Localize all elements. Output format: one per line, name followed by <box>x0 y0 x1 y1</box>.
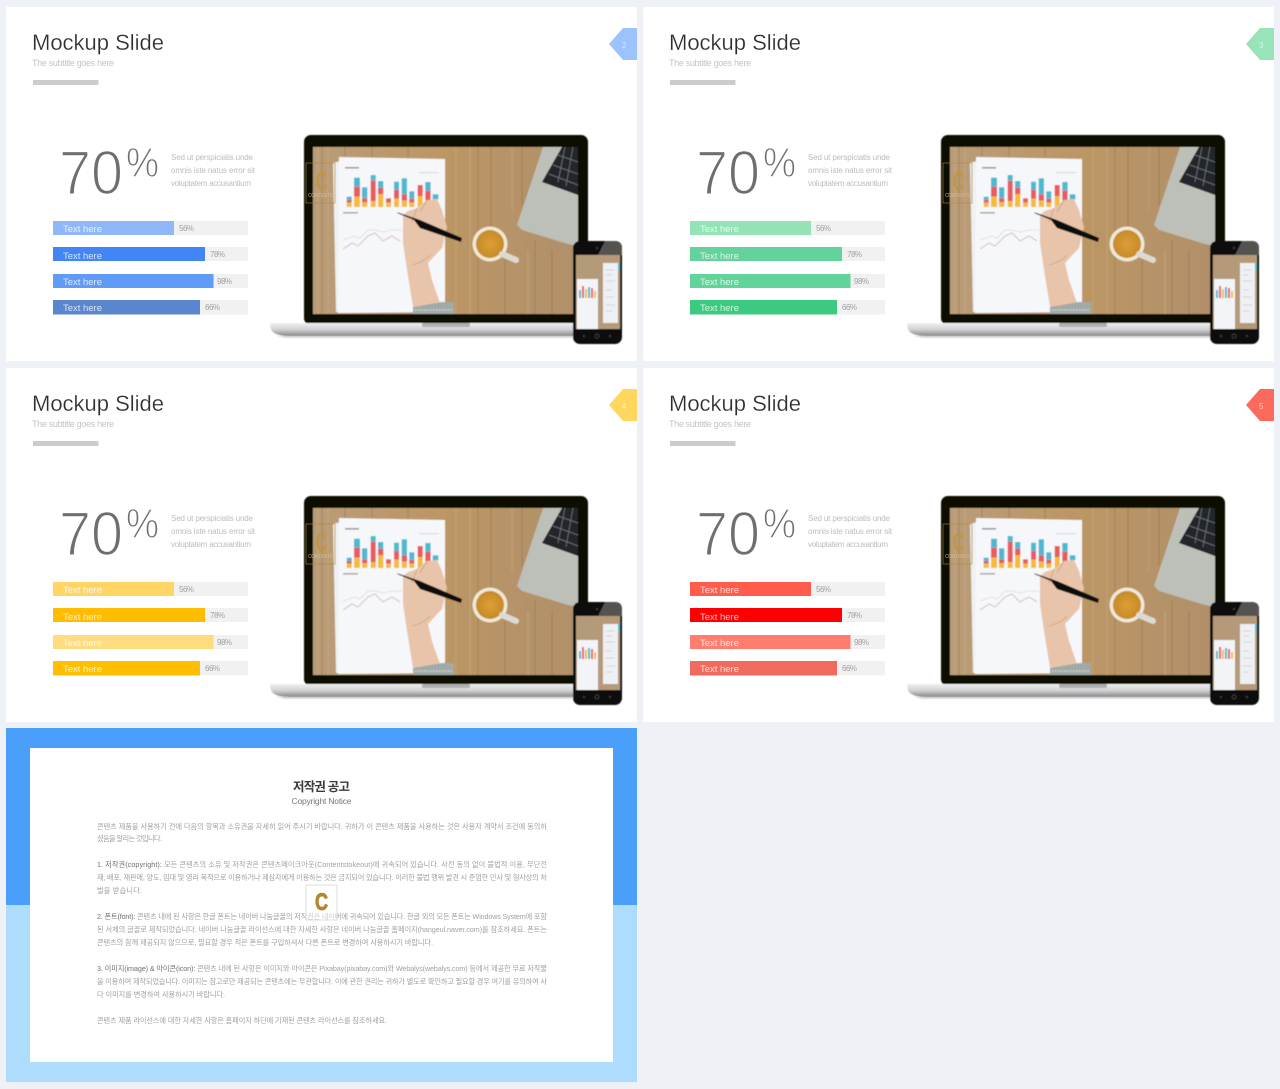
bar chart: Text here <box>63 224 102 235</box>
bar chart: 66% <box>842 664 857 673</box>
big number: % <box>763 500 796 547</box>
bar chart: 78% <box>210 611 225 620</box>
subtitle: The subtitle goes here <box>669 419 751 429</box>
description: omnis iste natus error sit <box>171 527 256 536</box>
section 2: font: 된 서체의 글꼴로 제작되었습니다. 네이버 나눔글꼴 라이선스에 대한 자세한 사항은 네이버 나눔글꼴 홈페이지(hangeul.naver.com)를 참조하세요. 폰트는 <box>97 925 547 934</box>
device mockup <box>270 135 622 344</box>
watermark <box>943 524 972 564</box>
bar chart: Text here <box>63 585 102 596</box>
bar chart: 98% <box>217 638 232 647</box>
big number: % <box>126 500 159 547</box>
bar chart: Text here <box>700 303 739 314</box>
section 2: font: 2. 폰트(font): 콘텐츠 내에 된 사항은 한글 폰트는 네이버 나눔글꼴의 저작권은 네이버에 귀속되어 있습니다. 한글 외의 모든 폰트는 Windows System에 포함 <box>97 912 547 921</box>
page tag: 4 <box>622 402 627 411</box>
bar chart: Text here <box>700 612 739 623</box>
description: voluptatem accusantium <box>171 540 251 549</box>
bar chart: 66% <box>205 664 220 673</box>
bar chart: Text here <box>700 251 739 262</box>
bar chart: 78% <box>847 611 862 620</box>
panel: copyright notice <box>6 728 637 1082</box>
watermark: C <box>316 166 327 196</box>
bar chart: Text here <box>700 638 739 649</box>
title: Mockup Slide <box>669 391 801 416</box>
intro paragraph: 콘텐츠 제품을 사용하기 전에 다음의 항목과 소유권을 자세히 읽어 주시기 바랍니다. 귀하가 이 콘텐츠 제품을 사용하는 것은 사용자 계약서 조건에 동의하 <box>97 822 547 831</box>
watermark: C <box>316 527 327 557</box>
license footer note: 콘텐츠 제품 라이선스에 대한 자세한 사항은 홈페이지 하단에 기재된 콘텐츠 라이선스를 참조하세요. <box>97 1016 387 1025</box>
panel: blue slide <box>6 7 637 361</box>
bar chart: 98% <box>217 277 232 286</box>
page tag <box>1246 28 1274 60</box>
description: voluptatem accusantium <box>808 179 888 188</box>
big number: % <box>763 139 796 186</box>
bar chart <box>690 221 885 314</box>
bar chart: Text here <box>63 664 102 675</box>
section 3: image and icon: 을 이용하여 제작되었습니다. 이미지는 참고로만 제공되는 콘텐츠에는 무관합니다. 이에 관한 권리는 귀하가 별도로 확인하고 필요할 경우 여기를 유의하여 사 <box>97 977 547 986</box>
description: Sed ut perspiciatis unde <box>808 153 891 162</box>
watermark: CONTENTS <box>945 193 971 199</box>
big number <box>696 139 796 208</box>
page tag <box>609 28 637 60</box>
title underline <box>33 441 98 446</box>
big number: 70 <box>59 500 123 569</box>
intro paragraph: 셨음을 알리는 것입니다. <box>97 834 162 843</box>
bar chart: 56% <box>179 585 194 594</box>
big number <box>59 500 159 569</box>
title: Mockup Slide <box>32 30 164 55</box>
bar chart: Text here <box>700 585 739 596</box>
bar chart: Text here <box>63 303 102 314</box>
panel: yellow slide <box>6 368 637 722</box>
description <box>171 514 256 549</box>
bar chart: 98% <box>854 638 869 647</box>
bar chart: 56% <box>179 224 194 233</box>
page tag: 5 <box>1259 402 1264 411</box>
intro paragraph <box>97 822 547 843</box>
section 1: copyright: 벌을 받습니다. <box>97 886 142 895</box>
big number: 70 <box>696 500 760 569</box>
watermark <box>306 163 335 203</box>
title: Mockup Slide <box>669 30 801 55</box>
subtitle: The subtitle goes here <box>32 419 114 429</box>
description: Sed ut perspiciatis unde <box>171 514 254 523</box>
bar chart: Text here <box>700 664 739 675</box>
bar chart <box>690 582 885 676</box>
description: voluptatem accusantium <box>808 540 888 549</box>
bar chart: 56% <box>816 585 831 594</box>
bar chart: 66% <box>205 303 220 312</box>
device mockup <box>907 135 1259 344</box>
big number <box>59 139 159 208</box>
bar chart: Text here <box>63 251 102 262</box>
title underline <box>670 80 736 85</box>
device mockup <box>907 496 1259 705</box>
description: voluptatem accusantium <box>171 179 251 188</box>
section 2: font <box>97 912 547 947</box>
bar chart: 78% <box>210 250 225 259</box>
page tag <box>1246 389 1274 421</box>
bar chart: 98% <box>854 277 869 286</box>
bar chart: Text here <box>700 277 739 288</box>
title underline <box>670 441 736 446</box>
page tag: 3 <box>1259 41 1264 50</box>
section 3: image and icon <box>97 964 547 999</box>
bar chart: Text here <box>63 638 102 649</box>
description <box>808 514 893 549</box>
bar chart: Text here <box>700 224 739 235</box>
section 1: copyright: 재, 배포, 재판매, 양도, 임대 및 영리 목적으로 이용하거나 제삼자에게 이용하는 것은 금지되어 있습니다. 이러한 불법 행위 발견 시 준엄한 민사 및 형사상의 처 <box>97 873 547 882</box>
subtitle: The subtitle goes here <box>32 58 114 68</box>
watermark: CONTENTS <box>308 554 334 560</box>
big number: 70 <box>59 139 123 208</box>
page tag <box>609 389 637 421</box>
description: omnis iste natus error sit <box>808 527 893 536</box>
watermark <box>943 163 972 203</box>
page tag: 2 <box>622 41 627 50</box>
panel: green slide <box>643 7 1274 361</box>
big number: % <box>126 139 159 186</box>
big number: 70 <box>696 139 760 208</box>
device mockup <box>270 496 622 705</box>
section 1: copyright: 1. 저작권(copyright): 모든 콘텐츠의 소유 및 저작권은 콘텐츠메이크아웃(Contentstokeout)에 귀속되어 있습니다. 사전 동의 없이 불법적 이용, 무단전 <box>97 860 547 869</box>
watermark: CONTENTS <box>945 554 971 560</box>
section 3: image and icon: 다 이미지를 변경하여 사용하시기 바랍니다. <box>97 990 225 999</box>
bar chart: 66% <box>842 303 857 312</box>
bar chart: Text here <box>63 612 102 623</box>
section 1: copyright <box>97 860 547 895</box>
title: Mockup Slide <box>32 391 164 416</box>
big number <box>696 500 796 569</box>
description: Sed ut perspiciatis unde <box>808 514 891 523</box>
description: Sed ut perspiciatis unde <box>171 153 254 162</box>
watermark <box>306 524 335 564</box>
panel: red slide <box>643 368 1274 722</box>
bar chart <box>53 221 248 314</box>
title underline <box>33 80 98 85</box>
description: omnis iste natus error sit <box>808 166 893 175</box>
watermark: C <box>953 166 964 196</box>
bar chart: 56% <box>816 224 831 233</box>
notice subheading: Copyright Notice <box>292 796 352 806</box>
subtitle: The subtitle goes here <box>669 58 751 68</box>
description: omnis iste natus error sit <box>171 166 256 175</box>
watermark: CONTENTS <box>308 193 334 199</box>
section 3: image and icon: 3. 이미지(image) & 아이콘(icon): 콘텐츠 내에 된 사항은 이미지와 아이콘은 Pixabay(pixabay.com)와 Webalys(webalys.com) 등에서 제공한 무료 저작물 <box>97 964 547 973</box>
notice heading: 저작권 공고 <box>293 779 350 794</box>
bar chart: Text here <box>63 277 102 288</box>
bar chart: 78% <box>847 250 862 259</box>
description <box>171 153 256 188</box>
bar chart <box>53 582 248 676</box>
section 2: font: 콘텐츠의 함께 제공되지 않으므로, 필요할 경우 적은 폰트를 구입하셔서 다른 폰트로 변경하여 사용하시기 바랍니다. <box>97 938 433 947</box>
watermark <box>306 885 337 920</box>
watermark: C <box>315 889 328 916</box>
watermark: C <box>953 527 964 557</box>
description <box>808 153 893 188</box>
